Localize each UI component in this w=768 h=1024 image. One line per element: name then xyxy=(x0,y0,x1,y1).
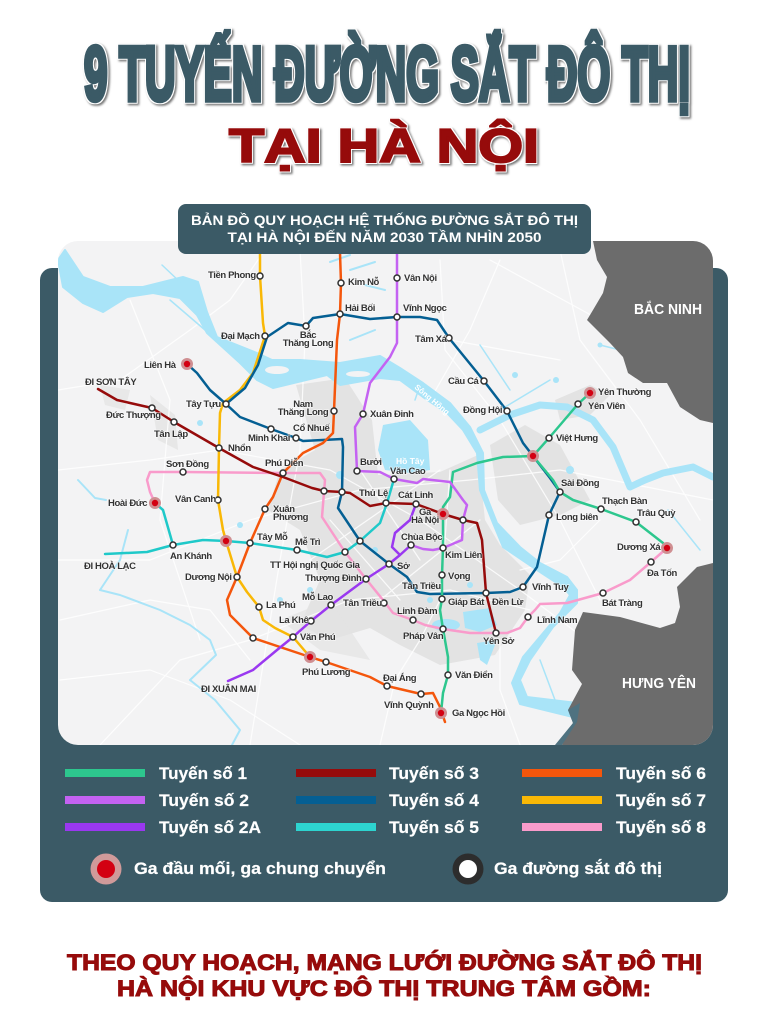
station labels xyxy=(84,270,677,719)
station labels: Thủ Lệ xyxy=(359,488,388,499)
line 8 pink xyxy=(147,472,667,633)
station labels: Yên Viên xyxy=(588,401,625,412)
station labels: Thượng Đình xyxy=(305,573,362,584)
station labels: Đại Mạch xyxy=(221,331,260,342)
station labels: Hà Nội xyxy=(411,515,439,526)
station labels: Bát Tràng xyxy=(602,598,643,609)
station labels: Thạch Bàn xyxy=(602,496,648,507)
station labels: TT Hội nghị Quốc Gia xyxy=(270,560,361,571)
station labels: Vọng xyxy=(448,571,471,582)
station labels: Đa Tốn xyxy=(647,568,677,579)
line 4 blue xyxy=(187,314,560,594)
station labels: Vĩnh Quỳnh xyxy=(384,700,434,711)
water highlights xyxy=(197,342,602,603)
station labels: Kim Nỗ xyxy=(348,277,380,288)
station labels: Yên Thường xyxy=(598,387,652,398)
station labels: Tây Mỗ xyxy=(257,532,288,543)
legend: lines: Tuyến số 6 xyxy=(616,764,706,783)
province label: Bắc Ninh: BẮC NINH xyxy=(634,300,702,318)
station labels: Vân Canh xyxy=(175,494,216,505)
header pill: map title: TẠI HÀ NỘI ĐẾN NĂM 2030 TẦM NHÌN 2050 xyxy=(228,228,542,245)
panel: legend background xyxy=(40,268,728,902)
legend: lines: Tuyến số 5 xyxy=(389,818,479,837)
line 7 yellow xyxy=(218,253,310,657)
line 2 light purple xyxy=(355,253,467,550)
station labels: Văn Phú xyxy=(300,632,336,643)
station labels: Thăng Long xyxy=(283,338,334,349)
station labels: ĐI SƠN TÂY xyxy=(85,376,137,388)
legend: lines: Tuyến số 2A xyxy=(159,818,261,837)
station labels: Phương xyxy=(273,512,309,523)
station labels: Mỗ Lao xyxy=(302,592,334,603)
lake label: Hồ Tây: Hồ Tây xyxy=(396,456,425,466)
station labels: Đức Thượng xyxy=(106,410,161,421)
legend: lines: Tuyến số 2 xyxy=(159,791,249,810)
station labels: ĐI HOÀ LẠC xyxy=(84,561,136,572)
legend: lines: Tuyến số 1 xyxy=(159,764,247,783)
station labels: Tân Triều xyxy=(402,581,441,592)
station labels: Vĩnh Tuy xyxy=(532,582,569,593)
station labels: Nam xyxy=(293,399,313,410)
station labels: Đền Lừ xyxy=(492,597,523,608)
station labels: Linh Đàm xyxy=(397,606,437,617)
station labels: Bưởi xyxy=(360,457,382,468)
station labels: Sơn Đồng xyxy=(166,459,209,470)
station labels: Hoài Đức xyxy=(108,498,147,509)
station labels: Cát Linh xyxy=(398,490,434,501)
legend: lines: Tuyến số 8 xyxy=(616,818,706,837)
station labels: Văn Cao xyxy=(390,466,426,477)
station labels: Dương Xá xyxy=(617,542,661,553)
station labels: Xuân Đỉnh xyxy=(370,409,414,420)
station labels: Ga xyxy=(419,507,432,518)
station labels: Sở xyxy=(397,561,410,572)
station labels: Vân Nội xyxy=(404,273,437,284)
station labels: Tân Lập xyxy=(154,429,188,440)
legend: lines xyxy=(65,764,706,837)
province: Hưng Yên xyxy=(562,563,713,745)
legend: interchange station: Ga đầu mối, ga chung chuyển xyxy=(134,859,386,878)
station labels: Dương Nội xyxy=(185,572,232,583)
station labels: Bắc xyxy=(300,329,316,341)
station labels: Hải Bối xyxy=(345,303,375,314)
station labels: Lĩnh Nam xyxy=(537,615,577,626)
station labels: Xuân xyxy=(273,504,295,515)
legend: lines: Tuyến số 7 xyxy=(616,791,706,810)
river label: Sông Hồng: Sông Hồng xyxy=(413,383,451,417)
station labels: Văn Điển xyxy=(455,670,493,681)
bottom heading: HÀ NỘI KHU VỰC ĐÔ THỊ TRUNG TÂM GỒM: xyxy=(117,976,651,1001)
station labels: La Khê xyxy=(279,615,308,626)
station labels: Đại Áng xyxy=(383,673,417,684)
station labels: Pháp Vân xyxy=(403,631,444,642)
province label: Hưng Yên: HƯNG YÊN xyxy=(622,674,696,692)
station labels: ĐI XUÂN MAI xyxy=(201,683,256,695)
bottom heading: THEO QUY HOẠCH, MẠNG LƯỚI ĐƯỜNG SẮT ĐÔ THỊ xyxy=(67,950,702,975)
station labels: Phú Diễn xyxy=(265,458,304,469)
station labels: Minh Khai xyxy=(248,433,290,444)
station labels: Vĩnh Ngọc xyxy=(403,303,447,314)
legend: lines: Tuyến số 4 xyxy=(389,791,480,810)
roads xyxy=(58,250,713,745)
station labels: Tây Tựu xyxy=(186,399,221,410)
stations xyxy=(149,273,654,697)
station labels: Việt Hưng xyxy=(556,433,598,444)
station labels: Tâm Xá xyxy=(415,334,448,345)
station labels: Giáp Bát xyxy=(448,597,485,608)
legend: regular station: Ga đường sắt đô thị xyxy=(494,859,662,878)
station labels: Long biên xyxy=(556,512,599,523)
legend: regular station xyxy=(452,854,662,884)
line 2A purple xyxy=(228,504,416,681)
station labels: Cầu Cá xyxy=(448,376,480,387)
station labels: Tân Triều xyxy=(343,598,382,609)
line 6 orange xyxy=(227,253,445,722)
urban areas xyxy=(100,378,610,665)
header pill: map title: BẢN ĐỒ QUY HOẠCH HỆ THỐNG ĐƯỜNG SẮT ĐÔ THỊ xyxy=(191,211,578,228)
station labels: Thăng Long xyxy=(278,407,329,418)
interchange stations xyxy=(149,358,673,719)
water xyxy=(58,250,577,718)
station labels: Phú Lương xyxy=(302,667,351,678)
station labels: Cổ Nhuế xyxy=(293,423,330,434)
station labels: Sài Đồng xyxy=(561,478,600,489)
panel: map xyxy=(58,241,713,745)
legend: lines: Tuyến số 3 xyxy=(389,764,479,783)
line 1 green xyxy=(440,393,667,713)
station labels: Liên Hà xyxy=(144,360,177,371)
line 5 cyan xyxy=(105,479,394,557)
station labels: Đồng Hội xyxy=(463,405,502,416)
station labels: Trâu Quỳ xyxy=(637,508,676,519)
station labels: Tiền Phong xyxy=(208,270,256,281)
station labels: Yên Sở xyxy=(483,636,514,647)
subtitle: tại Hà Nội: TẠI HÀ NỘI xyxy=(229,119,539,172)
station labels: Mễ Trì xyxy=(295,537,321,548)
station labels: La Phú xyxy=(266,600,296,611)
province: Bắc Ninh xyxy=(587,241,713,423)
header pill: map title xyxy=(178,204,591,254)
legend: interchange station xyxy=(90,854,386,884)
station labels: Kim Liên xyxy=(445,550,483,561)
station labels: Ga Ngọc Hồi xyxy=(452,708,505,719)
station labels: An Khánh xyxy=(170,551,212,562)
station labels: Chùa Bộc xyxy=(401,532,442,543)
station labels: Nhổn xyxy=(228,443,251,454)
line 3 dark red xyxy=(98,389,496,633)
bottom heading xyxy=(67,950,702,1001)
